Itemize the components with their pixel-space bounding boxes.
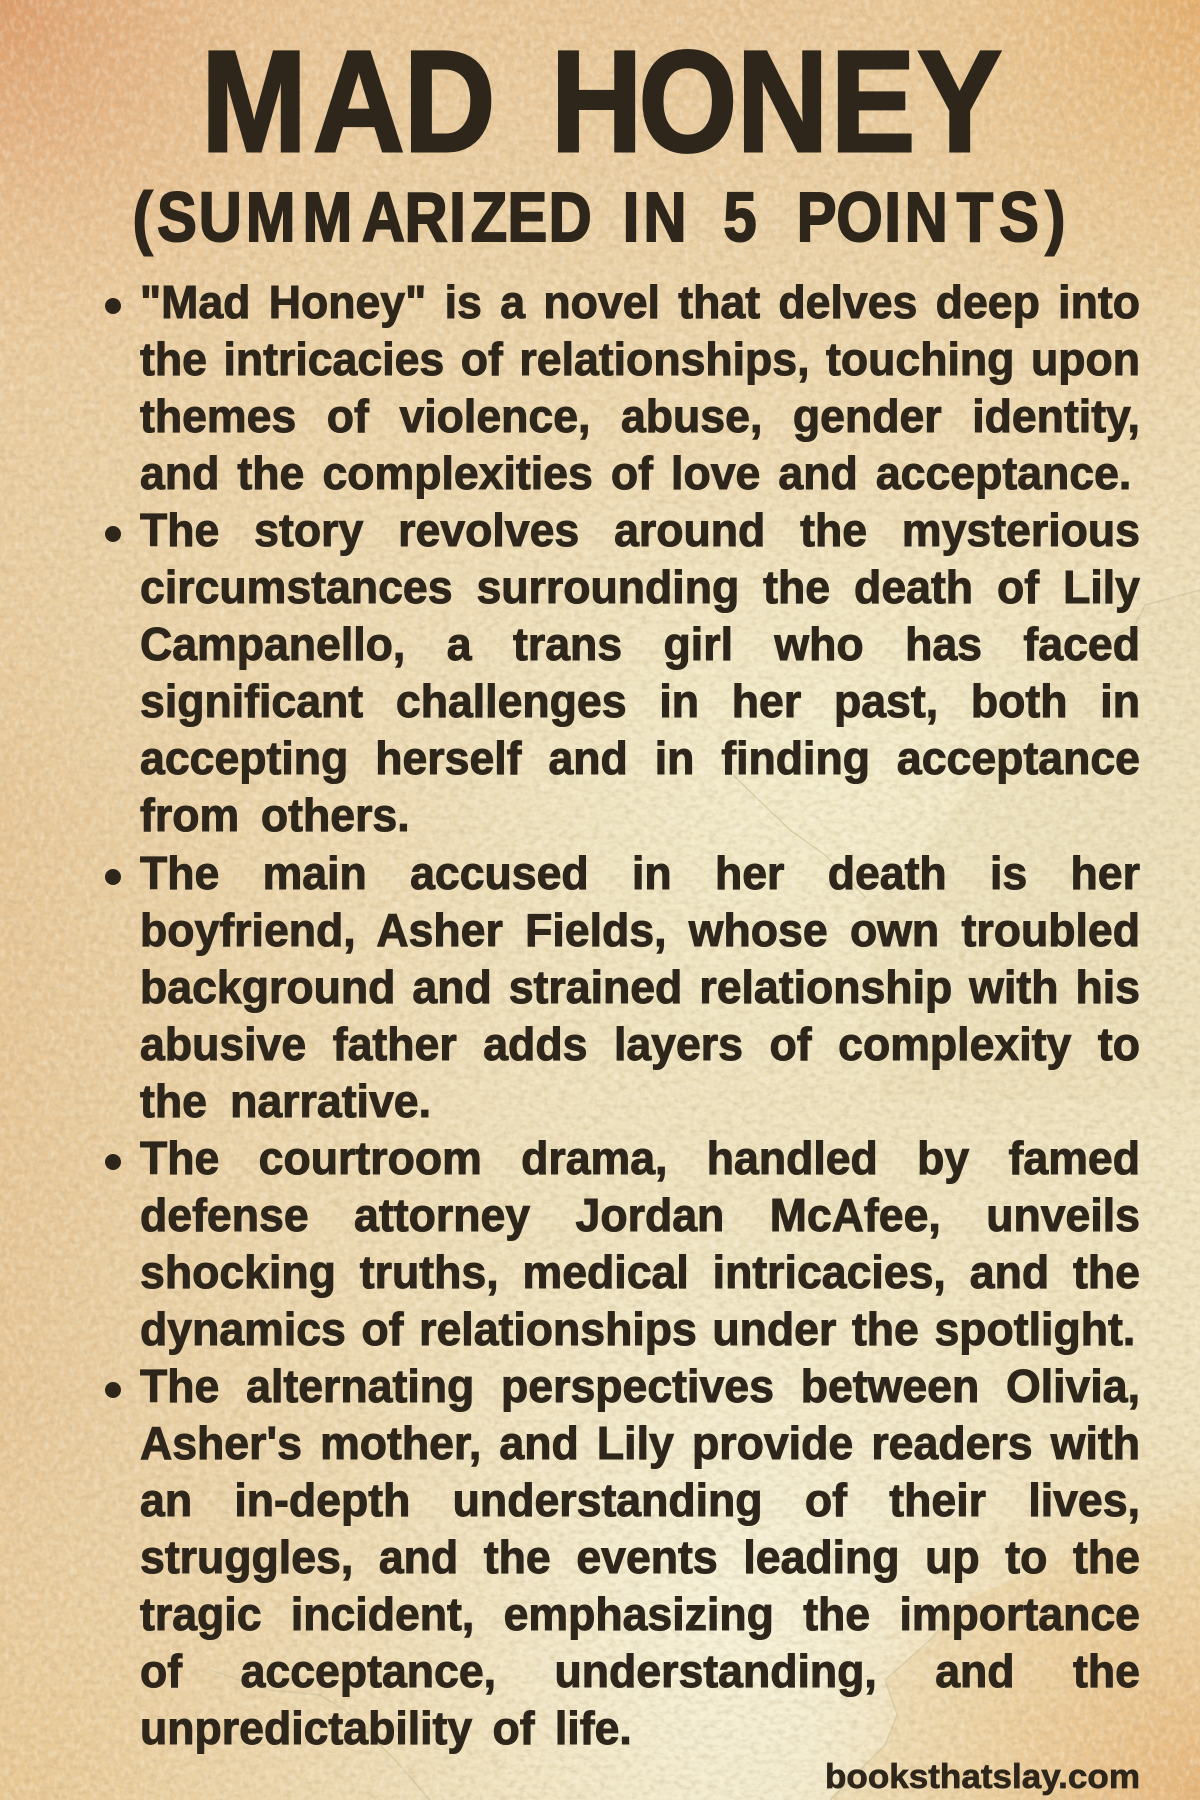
bullet 2: accepting herself and in finding acceptance — [140, 732, 1140, 784]
bullet 1: and the complexities of love and acceptance. — [140, 447, 1131, 499]
bullet 5: struggles, and the events leading up to the — [140, 1531, 1140, 1583]
bullet 2 — [105, 504, 1140, 841]
bullet 3 — [105, 846, 1140, 1127]
subtitle: (SUMMARIZED IN 5 POINTS) — [133, 177, 1065, 256]
bullet 3: background and strained relationship with his — [140, 961, 1140, 1013]
bullet 4: defense attorney Jordan McAfee, unveils — [140, 1189, 1140, 1241]
bullet 2: circumstances surrounding the death of Lily — [140, 561, 1140, 613]
bullet 2: Campanello, a trans girl who has faced — [140, 618, 1140, 670]
bullet 1: the intricacies of relationships, touching upon — [140, 333, 1140, 385]
bullet 4 — [105, 1132, 1140, 1355]
title: MAD HONEY — [201, 20, 1002, 182]
bullet 3: abusive father adds layers of complexity to — [140, 1018, 1140, 1070]
bullet 2: from others. — [140, 789, 410, 841]
bullet 3: The main accused in her death is her — [140, 846, 1140, 898]
bullet 1 — [105, 276, 1140, 499]
bullet 4: shocking truths, medical intricacies, and the — [140, 1246, 1140, 1298]
bullet 5: tragic incident, emphasizing the importance — [140, 1588, 1140, 1640]
bullet 5: unpredictability of life. — [140, 1702, 632, 1754]
bullet 5: of acceptance, understanding, and the — [140, 1645, 1140, 1697]
bullet 3: boyfriend, Asher Fields, whose own troubled — [140, 904, 1140, 956]
bullet 5: an in-depth understanding of their lives, — [140, 1474, 1140, 1526]
website credit: booksthatslay.com — [825, 1758, 1140, 1796]
bullet 1: themes of violence, abuse, gender identity, — [140, 390, 1140, 442]
bullet 2: The story revolves around the mysterious — [140, 504, 1140, 556]
bullet 5 — [105, 1360, 1140, 1754]
header: title and subtitle — [133, 20, 1065, 256]
bullet 3: the narrative. — [140, 1075, 431, 1127]
bullet 1: "Mad Honey" is a novel that delves deep into — [140, 276, 1140, 328]
bullet 5: Asher's mother, and Lily provide readers with — [140, 1417, 1140, 1469]
bullet 4: dynamics of relationships under the spotlight. — [140, 1303, 1135, 1355]
bullet 4: The courtroom drama, handled by famed — [140, 1132, 1140, 1184]
bullet 2: significant challenges in her past, both in — [140, 675, 1140, 727]
bullet 5: The alternating perspectives between Olivia, — [140, 1360, 1140, 1412]
